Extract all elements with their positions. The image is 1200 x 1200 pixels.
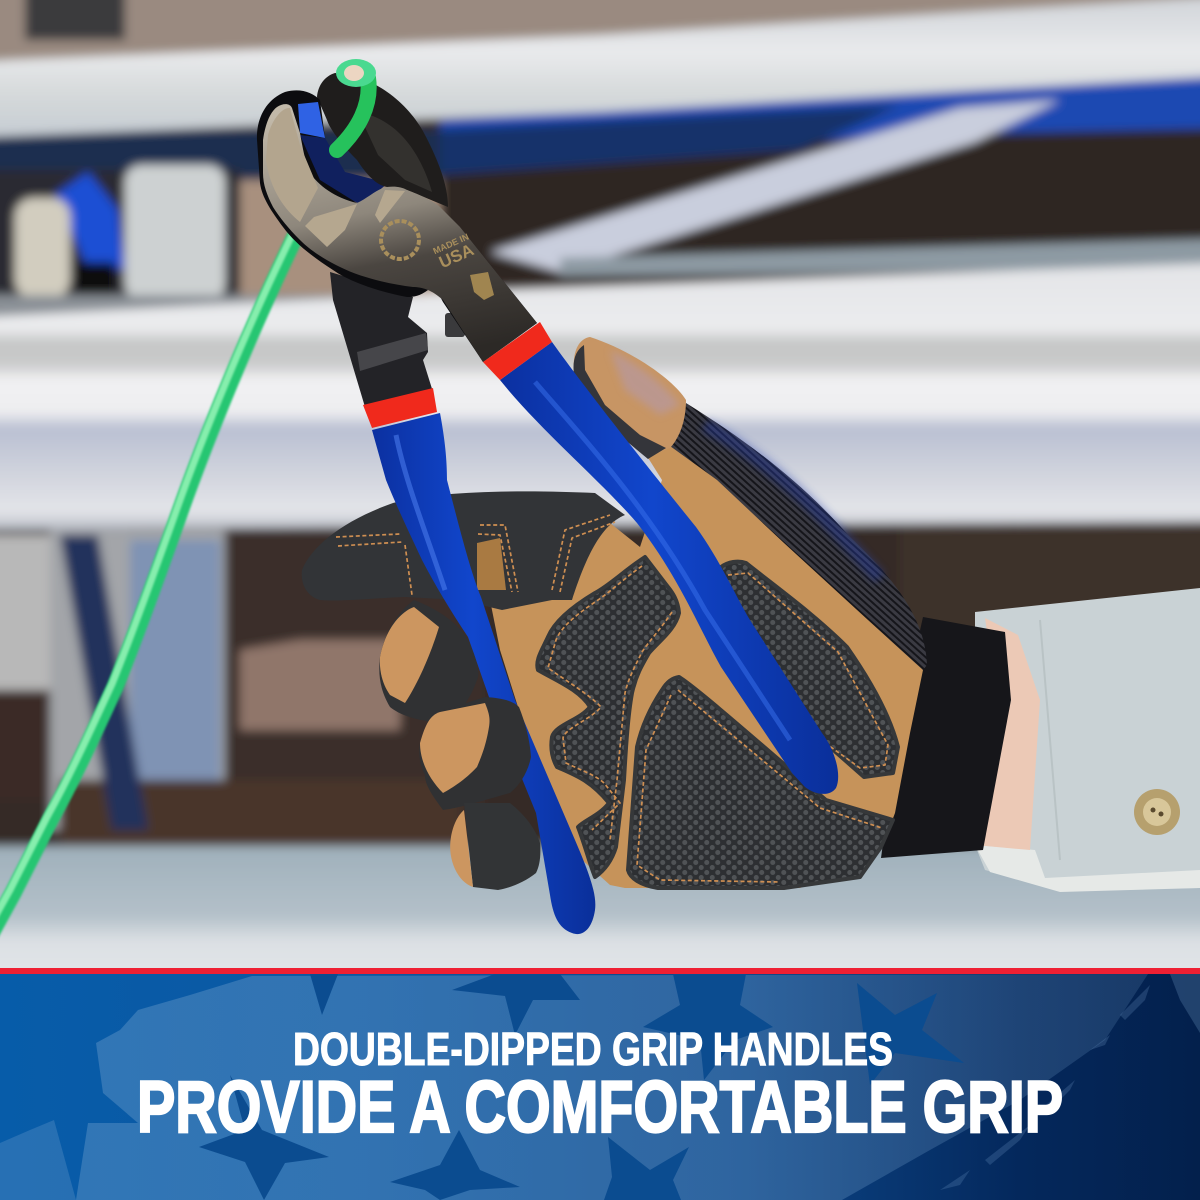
rear handle [372, 413, 595, 934]
icon: cuff button [1134, 789, 1180, 835]
gloved hand [302, 337, 1011, 888]
engraved text: MADE IN [432, 232, 470, 256]
star-engraved strip [266, 108, 318, 222]
medallion engraving [381, 221, 419, 259]
pliers [257, 73, 838, 934]
top blade [317, 73, 448, 207]
red collars [363, 388, 437, 428]
blue highlight [298, 102, 325, 138]
thumb [573, 337, 686, 459]
green wire: top run with cut end [336, 59, 376, 150]
head black edge [257, 90, 537, 362]
engraved logo [470, 272, 494, 300]
heading line 1: DOUBLE-DIPPED GRIP HANDLES [293, 1023, 893, 1075]
front handle [500, 342, 838, 794]
lower jaw [330, 272, 433, 407]
palm pad [537, 557, 679, 877]
blue sheen on ribbing [705, 425, 880, 578]
cuff: shirt sleeve [975, 588, 1200, 892]
tan gusset under index finger [477, 538, 506, 590]
blue notch reflection [300, 135, 388, 205]
little finger [450, 803, 540, 890]
pivot rivet [445, 313, 465, 337]
steel face [263, 104, 537, 362]
engraved text [432, 232, 478, 273]
glove main body tan [490, 425, 923, 888]
middle finger [379, 600, 478, 722]
ring finger [419, 697, 531, 810]
index finger [302, 491, 625, 610]
upper palm pad [721, 562, 898, 777]
lower palm pad [628, 677, 893, 888]
glove wrist band [881, 617, 1011, 858]
banner: blue background with stars [0, 974, 1200, 1200]
engraved text: USA [436, 240, 477, 272]
index stitching [336, 515, 615, 595]
green wire: lower run [0, 233, 296, 935]
glove back ribbed band [670, 403, 927, 670]
fingers over handle [379, 600, 540, 890]
banner: red rule [0, 968, 1200, 974]
